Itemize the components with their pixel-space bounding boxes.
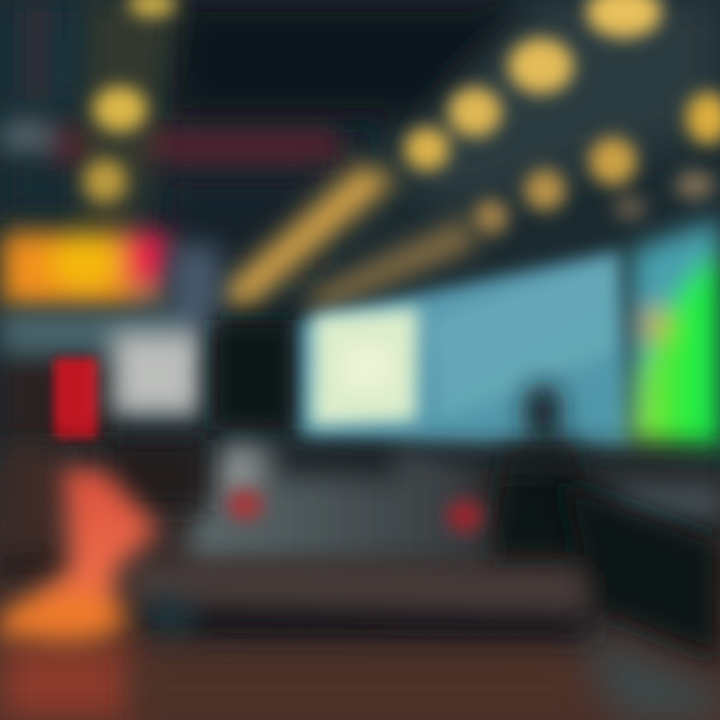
floor glow: orange streak (0, 465, 160, 642)
screen: green (628, 218, 720, 450)
light strips (215, 165, 478, 310)
silhouette: person (485, 384, 600, 560)
floor glow: orange red (0, 645, 135, 720)
car row (0, 440, 720, 560)
white panel (112, 332, 202, 416)
left shelving (0, 440, 205, 580)
dark column (212, 320, 297, 430)
red panel (54, 358, 98, 440)
ceiling (0, 0, 720, 270)
ceiling lights (83, 0, 720, 235)
screen: bright white (312, 308, 418, 426)
ceiling beam: red (0, 0, 340, 240)
table (130, 480, 720, 660)
floor: lower band (135, 630, 720, 720)
left sign: orange and red (2, 232, 169, 307)
screen: blue wall (300, 250, 630, 450)
car tail lights (227, 490, 483, 533)
left wall band (0, 245, 220, 445)
